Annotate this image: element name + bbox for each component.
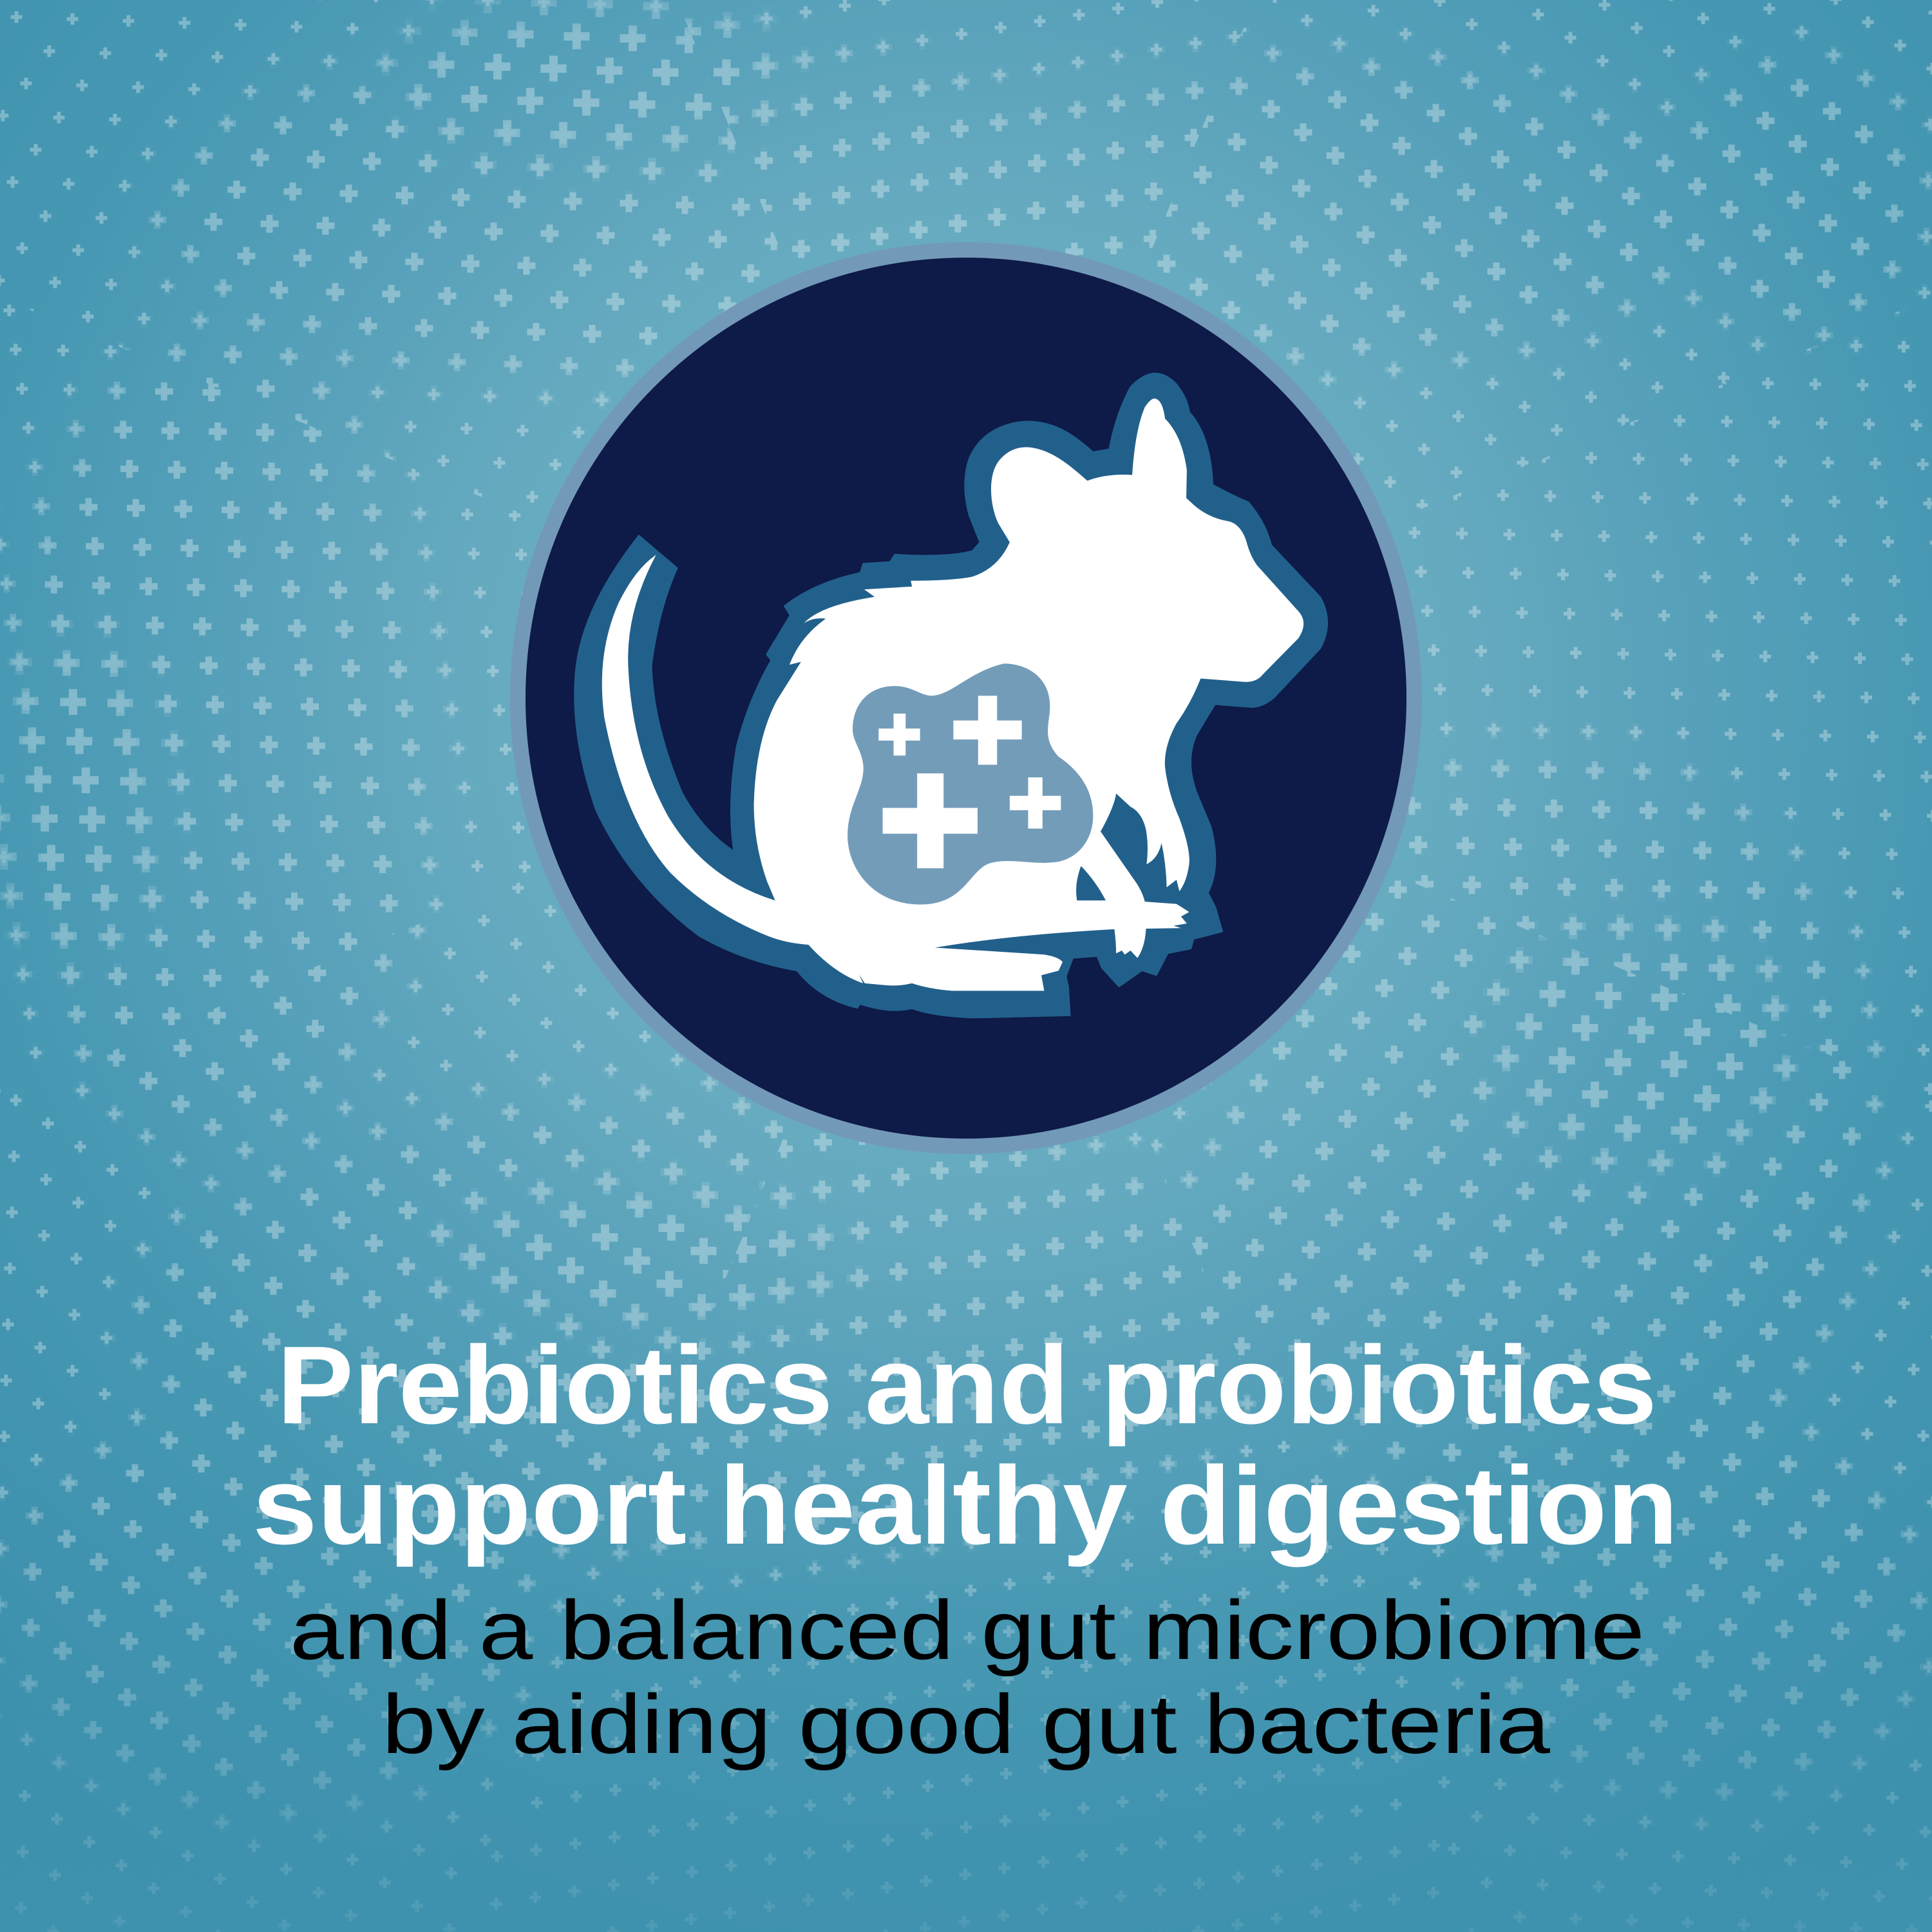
- title: Prebiotics and probiotics: [277, 1323, 1657, 1447]
- title: support healthy digestion: [252, 1444, 1678, 1567]
- rat outline: [574, 374, 1327, 1018]
- gut blob: [848, 663, 1093, 905]
- title: [252, 1323, 1678, 1567]
- leg gap: [1076, 866, 1106, 900]
- icon: rat with gut microbiome: [574, 374, 1327, 1018]
- subtitle: and a balanced gut microbiome: [290, 1583, 1645, 1677]
- rat silhouette: [602, 399, 1303, 990]
- subtitle: by aiding good gut bacteria: [382, 1677, 1551, 1771]
- gut plus symbols: [878, 696, 1061, 868]
- subtitle: [290, 1583, 1645, 1771]
- badge circle with outer ring: [510, 242, 1422, 1154]
